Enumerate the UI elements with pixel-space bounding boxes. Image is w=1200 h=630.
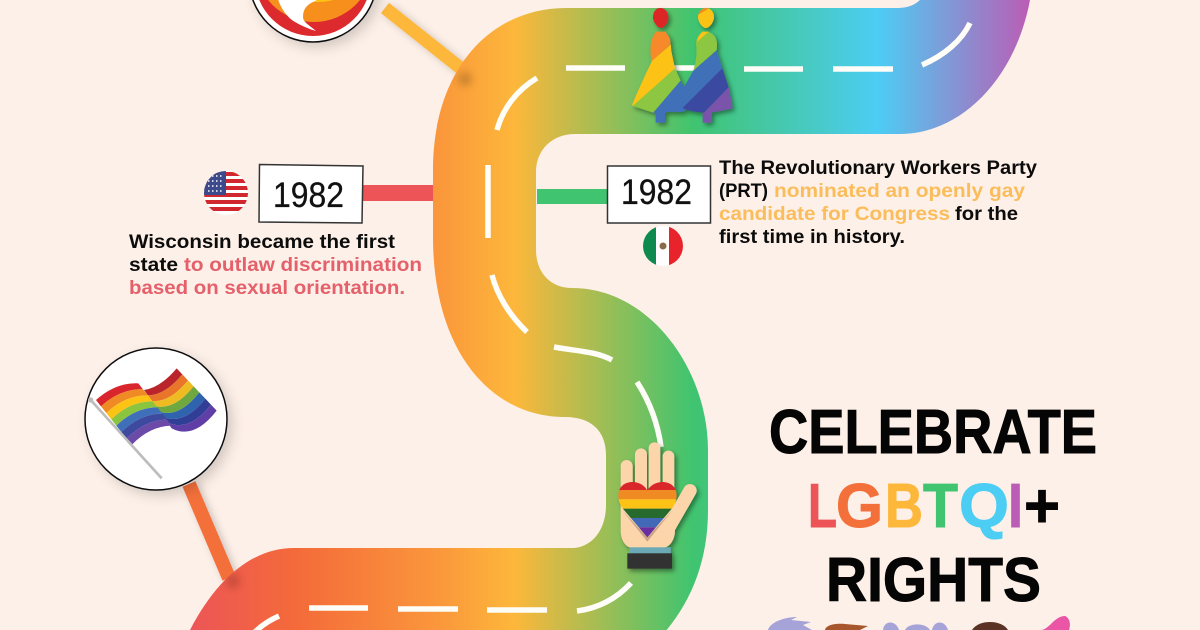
text block: PRT: for the bbox=[955, 203, 1018, 225]
title word: LGBTQI+ bbox=[808, 472, 1060, 541]
connector: red bar bbox=[363, 185, 433, 201]
title word: LGBTQI+: B bbox=[885, 472, 923, 541]
icon: two women in rainbow dresses bbox=[632, 8, 733, 123]
connector shadows on road bbox=[226, 72, 472, 588]
text block: Wisconsin bbox=[129, 231, 422, 299]
text block: PRT: (PRT) bbox=[719, 180, 768, 202]
title word: LGBTQI+: Q bbox=[959, 472, 1009, 541]
icon: continent bbox=[278, 0, 317, 31]
year box: 1982 left: 1982 bbox=[273, 176, 344, 215]
road centre dashes bbox=[255, 23, 970, 630]
connector: globe to road bbox=[385, 8, 468, 74]
title: CELEBRATE bbox=[769, 398, 1097, 467]
text block: Wisconsin: Wisconsin became the first bbox=[129, 231, 396, 253]
rainbow road bbox=[189, 0, 1030, 630]
title bbox=[769, 398, 1097, 615]
year box: 1982 left bbox=[259, 164, 363, 223]
text block: PRT: The Revolutionary Workers Party bbox=[719, 157, 1037, 179]
title word: LGBTQI+: T bbox=[923, 472, 958, 541]
title word: LGBTQI+: I bbox=[1008, 472, 1023, 541]
text block: PRT bbox=[719, 157, 1037, 248]
text block: Wisconsin: based on sexual orientation. bbox=[129, 277, 405, 299]
icon: hand holding rainbow heart bbox=[617, 442, 690, 569]
text block: PRT: candidate for Congress bbox=[719, 203, 950, 225]
title: RIGHTS bbox=[826, 546, 1041, 615]
year box: 1982 right bbox=[608, 166, 710, 223]
icon: globe circle bbox=[240, 0, 390, 50]
text block: Wisconsin: to outlaw discrimination bbox=[184, 254, 422, 276]
title word: LGBTQI+: + bbox=[1024, 472, 1060, 541]
text block: PRT: first time in history. bbox=[719, 226, 905, 248]
year box: 1982 right: 1982 bbox=[621, 173, 692, 212]
title word: LGBTQI+: L bbox=[808, 472, 837, 541]
icon: Mexico flag bbox=[643, 226, 683, 266]
text block: PRT: nominated an openly gay bbox=[774, 180, 1025, 202]
connector: green bar bbox=[537, 189, 608, 204]
connector: flag to road bbox=[189, 484, 229, 578]
title word: LGBTQI+: G bbox=[836, 472, 883, 541]
icons: diverse people hair row bbox=[768, 616, 1070, 630]
icon: USA flag bbox=[204, 171, 248, 215]
text block: Wisconsin: state bbox=[129, 254, 178, 276]
icon: rainbow flag circle bbox=[85, 348, 227, 490]
